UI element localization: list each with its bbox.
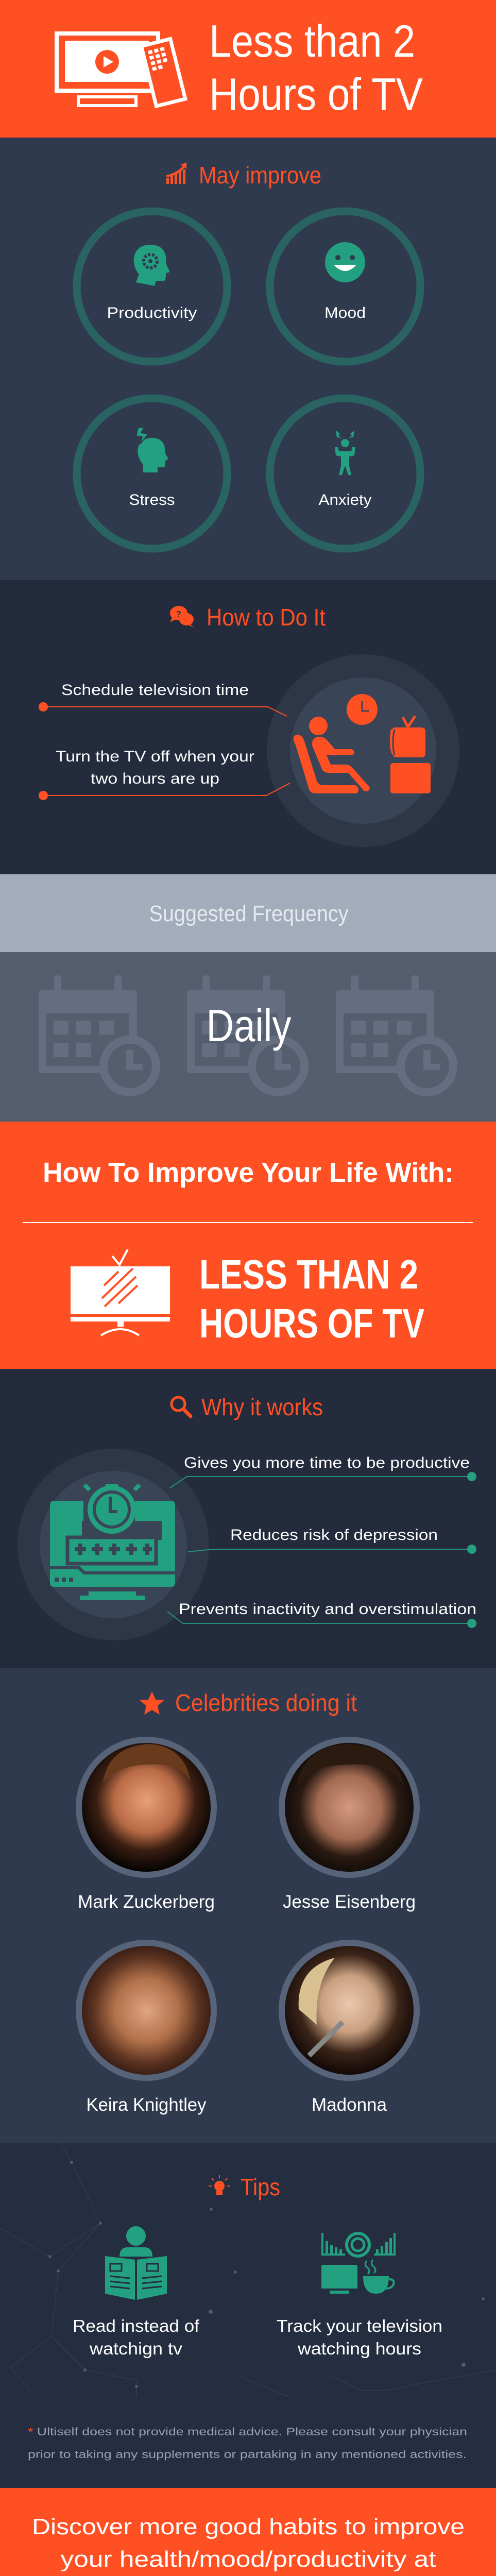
panel: daily frequency [0,952,496,1122]
title: less than 2 hours of tv: HOURS OF TV [199,1300,424,1346]
title: less than 2 hours of tv [199,1251,424,1346]
item: productivity [77,211,227,362]
item: mood: Mood [324,304,366,321]
celebrity: mark zuckerberg [76,1737,217,1912]
reason: depression: Reduces risk of depression [230,1527,438,1544]
celebrity: madonna [279,1940,420,2115]
item: anxiety: Anxiety [318,492,372,509]
panel: may improve [0,138,496,580]
title text: Less than 2 [209,15,415,66]
tip: read instead [73,2226,200,2358]
panel: why it works [0,1369,496,1668]
cta text [32,2514,465,2572]
cta text: your health/mood/productivity at [61,2547,436,2572]
heading: tips [209,2174,280,2200]
panel: call to action [0,2488,496,2576]
reason: depression [188,1527,476,1554]
item: mood [270,211,420,362]
panel: tips [0,2143,496,2488]
title text [209,15,423,120]
reason: inactivity [167,1601,476,1628]
illustration: person watching tv circle [267,654,459,847]
tip: read instead: watchign tv [89,2339,183,2358]
reason: more time: Gives you more time to be productive [184,1454,470,1471]
title: less than 2 hours of tv: LESS THAN 2 [199,1251,418,1297]
icon: tv [71,1249,170,1335]
heading: how to do it: How to Do It [207,604,326,631]
band: suggested frequency [0,874,496,952]
tip: track hours: watching hours [297,2339,421,2358]
disclaimer: prior to taking any supplements or partaking in any mentioned activities. [28,2449,467,2461]
step: turn tv off: Turn the TV off when your [56,748,254,765]
disclaimer: * Ultiself does not provide medical advice. Please consult your physician [28,2426,467,2438]
title text: Hours of TV [209,69,423,120]
step: turn tv off [39,748,290,800]
item: anxiety [270,398,420,549]
celebrity: madonna: Madonna [312,2095,387,2115]
heading: tips: Tips [241,2174,280,2200]
disclaimer [28,2426,467,2461]
celebrity: keira knightley: Keira Knightley [87,2095,207,2115]
celebrity: jesse eisenberg: Jesse Eisenberg [283,1892,416,1912]
item: stress [77,398,227,549]
item: stress: Stress [129,492,175,509]
icon: calendar clocks [39,975,453,1092]
celebrity: jesse eisenberg [279,1737,420,1912]
step: schedule television time: Schedule television time [61,682,249,699]
illustration: monitor with stopwatch [18,1449,209,1640]
tip: read instead: Read instead of [73,2316,200,2335]
heading: may improve: May improve [199,162,321,189]
panel: celebrities [0,1668,496,2143]
reason: inactivity: Prevents inactivity and overstimulation [179,1601,476,1618]
panel: how to do it [0,580,496,874]
heading: how to improve: How To Improve Your Life With: [43,1157,454,1188]
item: productivity: Productivity [107,304,197,321]
header: title banner [0,0,496,138]
reason: more time [170,1454,476,1488]
icon: TV with remote [57,33,185,106]
heading: why it works: Why it works [201,1394,323,1420]
tip: track hours [277,2233,442,2358]
tip: track hours: Track your television [277,2316,442,2335]
celebrity: keira knightley [76,1940,217,2115]
step: turn tv off: two hours are up [91,770,219,787]
band: suggested frequency: Suggested Frequency [149,901,348,926]
text: daily: Daily [206,1000,292,1051]
panel: how to improve your life [0,1122,496,1369]
cta text: Discover more good habits to improve [32,2514,465,2539]
step: schedule television time [39,682,287,716]
celebrity: mark zuckerberg: Mark Zuckerberg [78,1892,215,1912]
heading: how to do it: ? [176,610,181,619]
heading: celebrities: Celebrities doing it [175,1689,357,1716]
